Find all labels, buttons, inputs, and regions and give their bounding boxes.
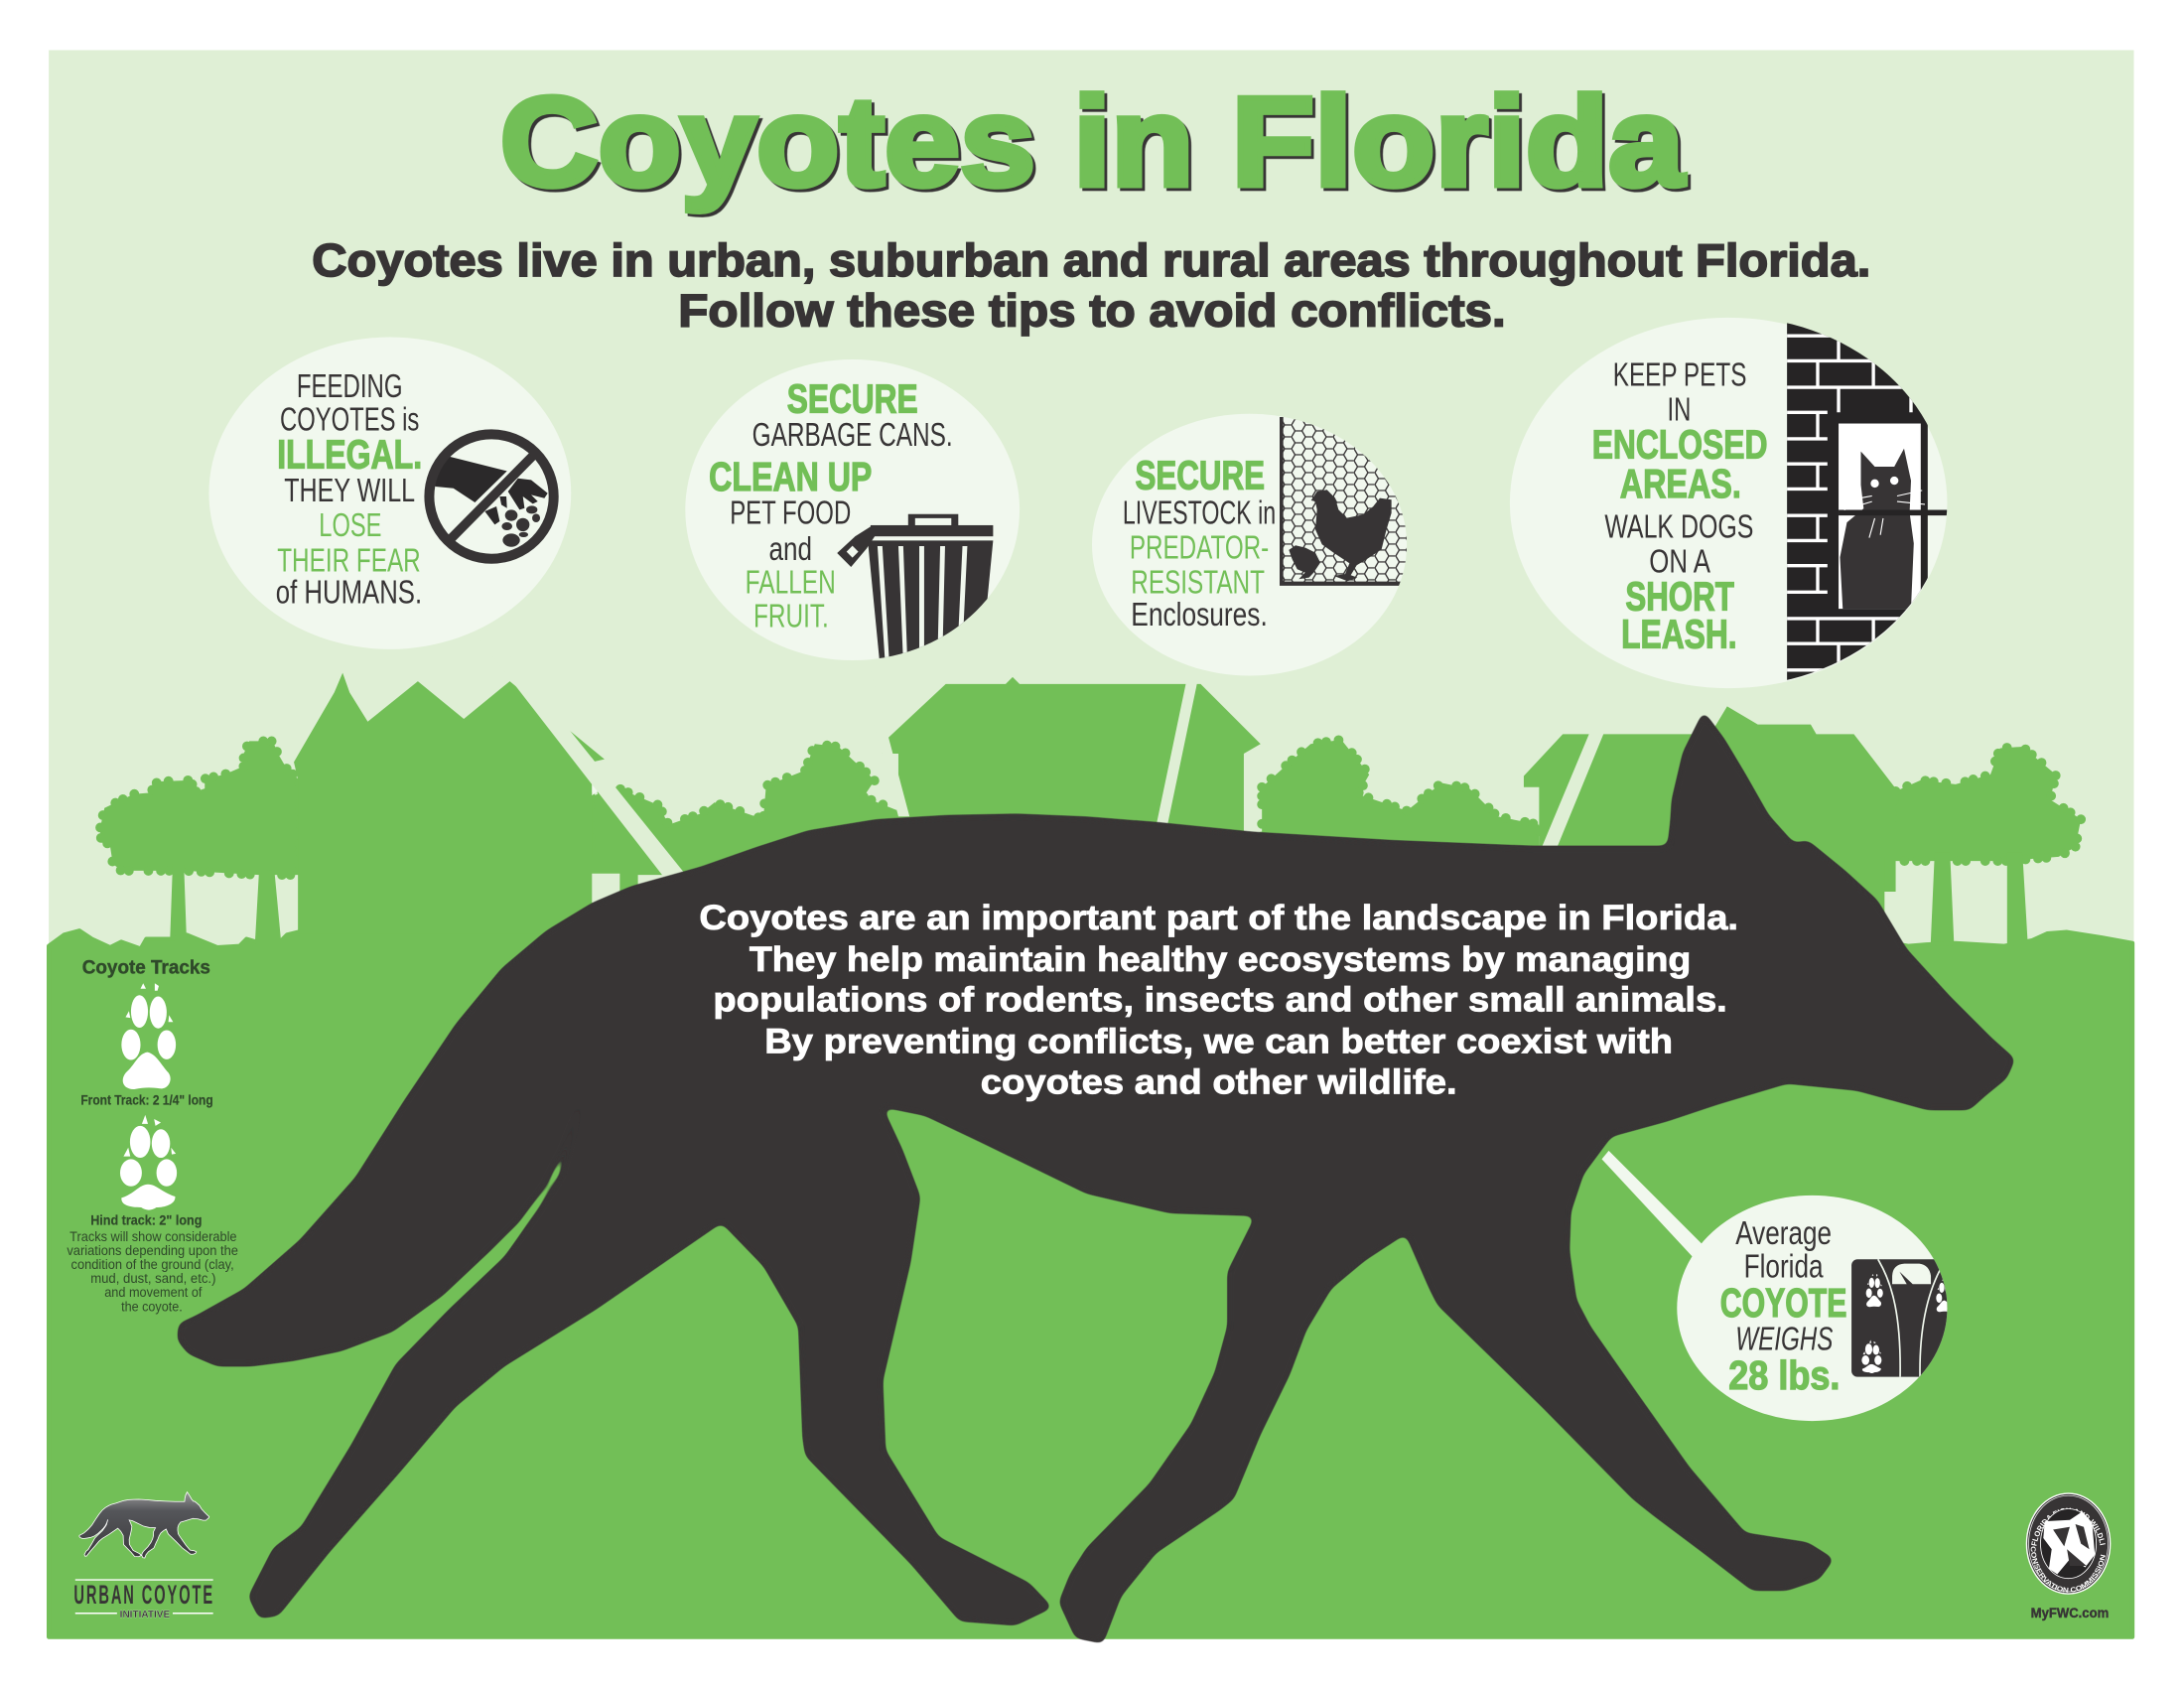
logo: florida fish and wildlife: FLORIDA FISH AND WILDLIFE: [2031, 1507, 2106, 1546]
logo: urban coyote initiative: INITIATIVE: [120, 1610, 171, 1620]
text: weight: Florida: [1744, 1249, 1824, 1286]
body text: [699, 899, 1738, 1101]
icon: chicken in wire: [1280, 417, 1413, 586]
tracks note: the coyote.: [121, 1298, 183, 1314]
tree: right crown: [1884, 747, 2081, 861]
panel: coyote tracks: Hind track: 2" long: [90, 1211, 202, 1227]
body text: populations of rodents, insects and other small animals.: [713, 981, 1727, 1020]
text: feeding: FEEDING: [297, 368, 402, 405]
tracks note: mud, dust, sand, etc.): [90, 1270, 215, 1286]
body text: By preventing conflicts, we can better coexist with: [764, 1023, 1673, 1061]
text: garbage: FRUIT.: [753, 598, 829, 634]
text: feeding: of HUMANS.: [276, 575, 422, 612]
tracks note: [67, 1228, 238, 1314]
text: weight: COYOTE: [1720, 1280, 1846, 1326]
text: keep pets: SHORT: [1625, 574, 1734, 620]
ground: [49, 930, 2132, 1637]
text: keep pets: ENCLOSED: [1592, 422, 1767, 468]
tree trunks: [170, 853, 2028, 947]
logo: urban coyote initiative: [73, 1492, 214, 1620]
panel: secure garbage: [685, 359, 1020, 668]
subtitle: [312, 234, 1870, 336]
text: garbage: CLEAN UP: [709, 454, 872, 499]
text: keep pets: [1592, 357, 1767, 656]
panel: feeding is illegal: [208, 338, 571, 649]
text: feeding: THEIR FEAR: [277, 542, 421, 579]
coyote silhouette: [177, 711, 2015, 1644]
gap under eave: [592, 874, 683, 903]
text: garbage: FALLEN: [746, 565, 836, 602]
text: garbage: and: [768, 531, 812, 568]
tree: left crown: [100, 741, 300, 875]
text: keep pets: WALK DOGS: [1604, 509, 1753, 546]
icon: no feeding: [429, 434, 554, 559]
text: livestock: [1123, 452, 1276, 633]
text: feeding: THEY WILL: [284, 473, 415, 509]
text: feeding: COYOTES is: [280, 402, 419, 439]
tracks note: condition of the ground (clay,: [71, 1256, 234, 1272]
text: livestock: LIVESTOCK in: [1123, 495, 1276, 532]
text: weight: WEIGHS: [1735, 1322, 1834, 1358]
text: livestock: PREDATOR-: [1130, 530, 1269, 567]
body text: They help maintain healthy ecosystems by managing: [750, 940, 1691, 979]
callout lines: [477, 630, 1705, 1258]
logo: florida fish and wildlife: CONSERVATION COMMISSION: [2031, 1547, 2106, 1593]
house: centre: [882, 677, 1261, 892]
ground band: [298, 857, 1884, 954]
text: feeding: ILLEGAL.: [277, 431, 422, 477]
house: right: [1524, 706, 1896, 892]
icon: cat in window and brick wall: [1787, 319, 1950, 688]
tracks note: Tracks will show considerable: [69, 1228, 237, 1244]
text: keep pets: ON A: [1649, 544, 1710, 581]
eave highlight: [592, 758, 609, 795]
text: keep pets: LEASH.: [1621, 611, 1737, 656]
tree: centre-right crown: [1262, 740, 1539, 871]
panel: coyote tracks: Front Track: 2 1/4" long: [80, 1092, 213, 1108]
logo: urban coyote initiative: URBAN COYOTE: [73, 1580, 214, 1610]
subtitle: Follow these tips to avoid conflicts.: [678, 284, 1506, 336]
panel: keep pets enclosed: [1510, 318, 1950, 688]
icon: front track: [121, 983, 176, 1089]
tracks note: and movement of: [104, 1284, 203, 1300]
text: feeding: LOSE: [319, 507, 381, 544]
icon: hind track: [120, 1115, 177, 1210]
text: garbage: SECURE: [787, 375, 918, 421]
body text: coyotes and other wildlife.: [981, 1062, 1457, 1101]
subtitle: Coyotes live in urban, suburban and rural areas throughout Florida.: [312, 234, 1870, 286]
title: Coyotes in Florida: [500, 71, 1685, 213]
tree: centre-left crown: [591, 744, 905, 872]
panel: coyote tracks: [67, 957, 238, 1314]
text: livestock: SECURE: [1135, 452, 1265, 497]
panel: average weight: [1677, 1196, 1958, 1421]
text: keep pets: IN: [1667, 392, 1691, 429]
text: weight: [1720, 1215, 1846, 1398]
text: garbage: GARBAGE CANS.: [752, 417, 953, 454]
skyline: houses and trees: [100, 673, 2081, 954]
tracks note: variations depending upon the: [67, 1242, 238, 1258]
text: weight: Average: [1735, 1215, 1832, 1252]
panel: secure livestock: [1092, 414, 1413, 675]
text: weight: 28 lbs.: [1728, 1352, 1840, 1398]
icon: scale: [1851, 1259, 1958, 1377]
icon: trash can: [837, 514, 993, 668]
house: left: [294, 673, 605, 947]
text: livestock: RESISTANT: [1131, 565, 1265, 602]
text: garbage: [709, 375, 953, 634]
text: keep pets: AREAS.: [1620, 461, 1741, 506]
text: feeding: [276, 368, 422, 612]
body text: Coyotes are an important part of the landscape in Florida.: [699, 899, 1738, 937]
text: garbage: PET FOOD: [730, 495, 851, 532]
text: keep pets: KEEP PETS: [1613, 357, 1746, 394]
text: livestock: Enclosures.: [1131, 597, 1268, 633]
logo: florida fish and wildlife: MyFWC.com: [2031, 1605, 2109, 1620]
panel: coyote tracks: Coyote Tracks: [82, 957, 210, 979]
